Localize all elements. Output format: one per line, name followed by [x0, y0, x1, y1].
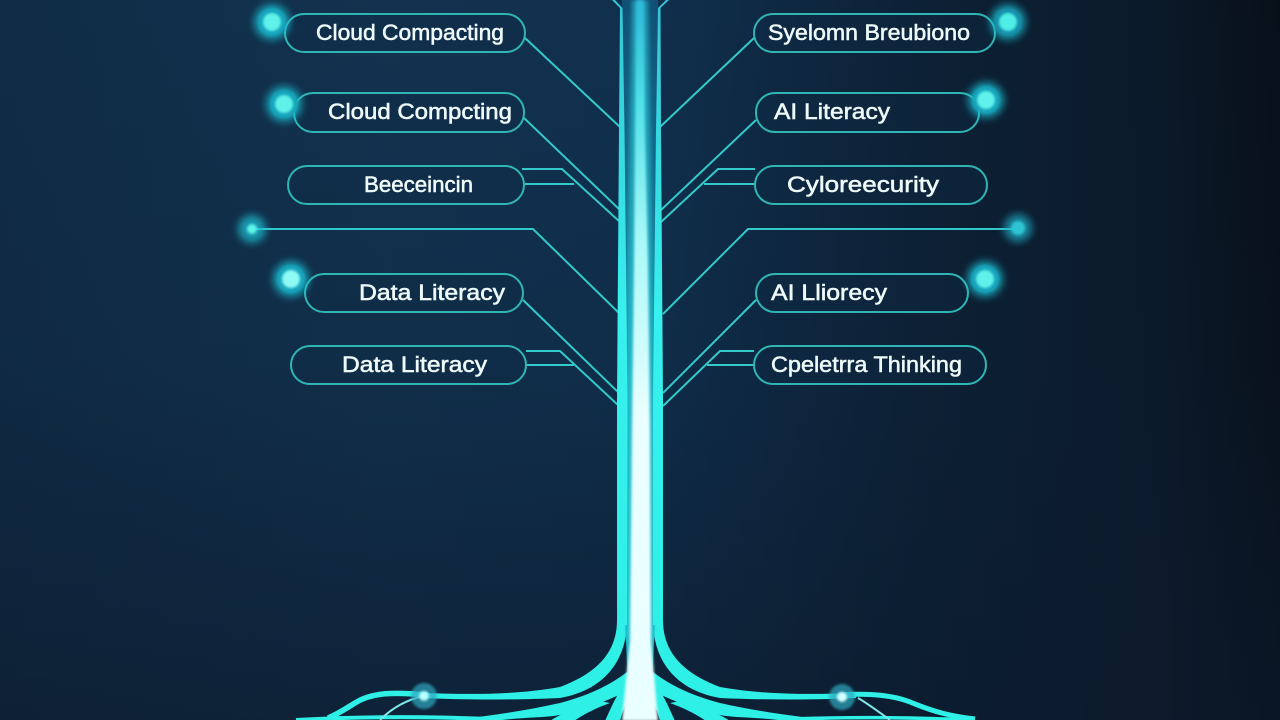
- node: left 4: [273, 261, 309, 297]
- node: right 2: [968, 82, 1004, 118]
- node: root left: [411, 683, 437, 709]
- pill: Data Literacy 2: [291, 346, 526, 384]
- central trunk: [612, 0, 669, 720]
- node: right 4: [967, 261, 1003, 297]
- pill: Data Literacy 2: Data Literacy: [342, 352, 488, 377]
- pill: Syelomn Breubiono: Syelomn Breubiono: [768, 20, 970, 45]
- pill: Cloud Computing 1: Cloud Compacting: [316, 20, 504, 45]
- roots: [296, 620, 975, 720]
- pill: AI Literacy: [756, 93, 979, 132]
- pill: Beecdeincin: Beeceincin: [364, 172, 473, 197]
- pill: AI Lliorecy: AI Lliorecy: [771, 280, 888, 305]
- pill: Syelomn Breubiono: [754, 14, 995, 52]
- pill: Cpeletrra Thinking: Cpeletrra Thinking: [771, 352, 962, 377]
- pill: Cloud Computing 2: Cloud Compcting: [328, 99, 512, 124]
- node: right 1: [990, 4, 1026, 40]
- node: left 2: [266, 86, 302, 122]
- node: left 1: [254, 4, 290, 40]
- pill: Cloud Computing 1: [285, 14, 525, 52]
- connector lines: right: [660, 38, 1018, 406]
- pill: Cyberecurity: Cyloreecurity: [787, 172, 940, 197]
- node: right 3: [1004, 214, 1032, 242]
- roots: right tails: [790, 694, 975, 720]
- roots: left bands: [424, 620, 632, 720]
- pill: Cpeletrra Thinking: [754, 346, 986, 384]
- pill: Data Literacy 1: Data Literacy: [359, 280, 506, 305]
- pill: AI Literacy: AI Literacy: [774, 99, 891, 124]
- pill: Cloud Computing 2: [294, 93, 524, 132]
- pill: AI Lliorecy: [756, 274, 968, 312]
- roots: left tails: [296, 693, 490, 720]
- node: left 3: [238, 215, 266, 243]
- roots: right bands: [648, 620, 856, 720]
- pill: Data Literacy 1: [305, 274, 523, 312]
- node: root right: [829, 684, 855, 710]
- pill: Cyberecurity: [755, 166, 987, 204]
- pill: Beecdeincin: [288, 166, 524, 204]
- connector lines: left: [252, 38, 620, 406]
